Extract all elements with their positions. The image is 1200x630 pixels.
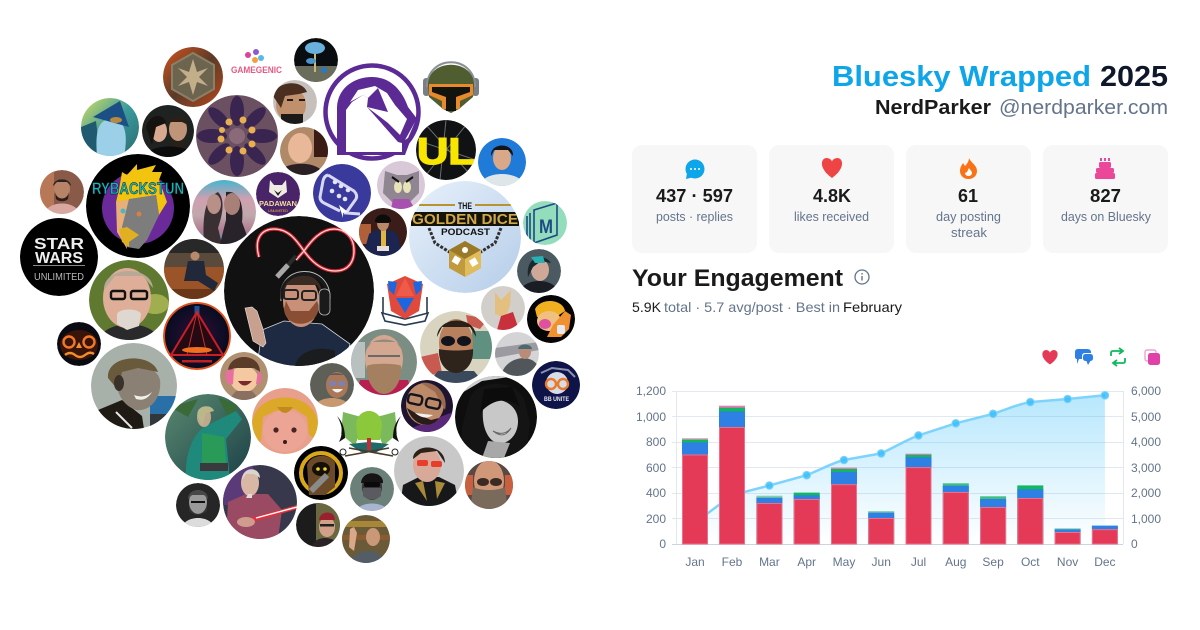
avatar: comic man bbox=[273, 80, 317, 124]
right axis labels: 1,000 bbox=[1131, 512, 1161, 526]
icon: likes bbox=[1042, 350, 1058, 364]
right axis labels: 6,000 bbox=[1131, 384, 1161, 398]
bar: Dec bbox=[1092, 526, 1118, 544]
right axis labels bbox=[1131, 384, 1161, 551]
icon: reposts bbox=[1111, 348, 1125, 366]
avatar: purple flower bbox=[196, 95, 278, 177]
bar: Sep bbox=[980, 496, 1006, 544]
avatar: green Cthulhu crest bbox=[337, 411, 401, 456]
stat card: days on Bluesky: 827 bbox=[1090, 186, 1121, 206]
lightsaber hilt bbox=[277, 256, 296, 277]
left axis labels: 800 bbox=[646, 435, 666, 449]
avatar: bearded man with red shirt bbox=[351, 329, 417, 395]
avatar: M book logo: M bbox=[539, 217, 553, 238]
avatar: Star Wars Unlimited logo: WARS bbox=[35, 250, 83, 267]
bar: Aug bbox=[943, 483, 969, 544]
month labels: Dec bbox=[1094, 555, 1116, 569]
avatar: woman with red glasses bbox=[394, 436, 464, 506]
bar: Jan bbox=[682, 438, 708, 544]
avatar: D20 book logo bbox=[382, 276, 428, 325]
month labels: Aug bbox=[945, 555, 966, 569]
stacked bars bbox=[682, 406, 1118, 544]
left axis labels: 200 bbox=[646, 512, 666, 526]
avatar: pink-haired cartoon girl bbox=[220, 352, 268, 400]
avatar: wizard bird bbox=[81, 98, 139, 156]
cumulative line with points bbox=[695, 392, 1109, 523]
heading: Your Engagement: Your Engagement bbox=[632, 265, 843, 292]
avatar: BB8 badge: BB UNITE bbox=[544, 396, 570, 403]
month labels: Apr bbox=[797, 555, 816, 569]
avatar: BB8 badge bbox=[532, 361, 580, 409]
avatar: Jawa in hood bbox=[294, 446, 348, 500]
user name and handle: NerdParker bbox=[875, 97, 991, 119]
icon: replies bbox=[1075, 349, 1093, 365]
avatar: sketched man smiling bbox=[91, 343, 177, 429]
bar: Mar bbox=[756, 496, 782, 544]
stat card: posts and replies: posts · replies bbox=[656, 210, 733, 224]
avatar: purple arrow house logo bbox=[326, 66, 418, 158]
stat card: days on Bluesky bbox=[1043, 145, 1168, 253]
title: 2025 bbox=[1100, 61, 1168, 93]
stat card: days on Bluesky: days on Bluesky bbox=[1061, 210, 1152, 224]
left axis labels: 400 bbox=[646, 486, 666, 500]
right axis labels: 4,000 bbox=[1131, 435, 1161, 449]
bar: Feb bbox=[719, 406, 745, 544]
avatar: man in aviators bbox=[420, 311, 492, 383]
avatar: hexagon sun emblem bbox=[163, 47, 223, 107]
avatar: bald man bbox=[278, 127, 328, 175]
avatar: Padawan Unlimited logo: UNLIMITED bbox=[268, 208, 288, 213]
stat card: posts and replies: 437 · 597 bbox=[656, 186, 733, 206]
right axis labels: 3,000 bbox=[1131, 461, 1161, 475]
avatar: woman in snow bbox=[495, 332, 539, 376]
avatar: Golden Dice Podcast logo: THE bbox=[458, 201, 472, 211]
avatar: couple portrait bbox=[142, 105, 194, 157]
engagement summary: 5.9K bbox=[632, 299, 662, 315]
month labels: Sep bbox=[982, 555, 1004, 569]
avatar: main profile, NerdParker with neon infinity bbox=[224, 216, 374, 367]
user name and handle: @nerdparker.com bbox=[999, 97, 1168, 119]
month labels bbox=[685, 555, 1116, 569]
avatar: smiling woman with glasses bbox=[310, 363, 354, 407]
stat card: likes received: 4.8K bbox=[813, 186, 851, 206]
avatar: Wario bbox=[527, 295, 575, 343]
month labels: Nov bbox=[1057, 555, 1078, 569]
left axis labels: 1,200 bbox=[636, 384, 666, 398]
icon: quotes bbox=[1145, 350, 1160, 365]
right axis labels: 5,000 bbox=[1131, 410, 1161, 424]
avatar: glowing triangle bbox=[164, 303, 230, 369]
avatar: Gamegenic logo bbox=[231, 49, 282, 75]
avatar: Rybackstun logo bbox=[86, 154, 190, 258]
avatar: UL yellow logo bbox=[416, 120, 476, 180]
avatar: Mandalorian helmet bbox=[423, 62, 479, 113]
engagement summary: total · 5.7 avg/post · Best in bbox=[664, 299, 840, 315]
avatar: masked person bbox=[350, 467, 394, 511]
bar: Apr bbox=[794, 493, 820, 544]
left axis labels: 1,000 bbox=[636, 410, 666, 424]
icon: heart bbox=[822, 158, 842, 178]
avatar: Gamegenic logo: GAMEGENIC bbox=[231, 65, 282, 75]
month labels: Jun bbox=[872, 555, 891, 569]
stat card: day posting streak: day posting bbox=[936, 210, 1001, 224]
avatar: elf sketch bbox=[481, 286, 525, 330]
NerdParker portrait bbox=[245, 271, 350, 367]
avatar: man with glasses on purple bbox=[401, 380, 453, 432]
month labels: Feb bbox=[722, 555, 743, 569]
left axis labels: 0 bbox=[659, 537, 666, 551]
avatar: Golden Dice Podcast logo bbox=[409, 181, 521, 293]
avatar: Count Dooku with red lightsaber bbox=[223, 465, 297, 539]
avatar: Star Wars Unlimited logo: UNLIMITED bbox=[34, 271, 84, 283]
avatar: grey bat creature bbox=[377, 161, 425, 209]
stat card: day posting streak bbox=[906, 145, 1031, 253]
avatar: Rybackstun logo: RYBACKSTUN bbox=[92, 179, 184, 198]
title: Bluesky Wrapped bbox=[832, 61, 1091, 93]
bar: May bbox=[831, 468, 857, 544]
avatar: blue mushrooms bbox=[294, 38, 338, 82]
avatar: man on blue bbox=[478, 138, 526, 186]
stat card: likes received: likes received bbox=[794, 210, 869, 224]
avatar: black and white portrait of a woman bbox=[455, 376, 537, 458]
engagement summary: February bbox=[843, 299, 902, 315]
month labels: Jul bbox=[911, 555, 926, 569]
bar: Jun bbox=[868, 511, 894, 544]
bar: Oct bbox=[1017, 485, 1043, 544]
avatar: Star Wars Unlimited logo bbox=[20, 218, 98, 296]
avatar: Golden Dice Podcast logo: GOLDEN DICE bbox=[412, 212, 518, 228]
left axis labels: 600 bbox=[646, 461, 666, 475]
icon: info bbox=[855, 270, 869, 284]
icon: flame bbox=[960, 158, 977, 179]
avatar: Golden Dice Podcast logo: PODCAST bbox=[441, 227, 491, 237]
avatar: man in red hat bbox=[296, 503, 340, 547]
avatar: Padawan Unlimited logo: PADAWAN bbox=[259, 199, 297, 208]
avatar: Sailor Moon cartoon bbox=[252, 388, 319, 454]
avatar: man waving in game shop bbox=[342, 515, 390, 563]
avatar: bearded man with headset bbox=[40, 170, 84, 214]
user name and handle bbox=[875, 97, 1168, 119]
avatar: bearded man black and white bbox=[176, 483, 220, 527]
month labels: Oct bbox=[1021, 555, 1040, 569]
stat card: posts and replies bbox=[632, 145, 757, 253]
month labels: May bbox=[833, 555, 855, 569]
chart legend icons bbox=[1042, 348, 1160, 366]
avatar: Star Wars Unlimited logo: STAR bbox=[34, 236, 85, 253]
avatar bubble cluster bbox=[20, 38, 580, 563]
avatar: green cloaked elf bbox=[165, 394, 251, 480]
bar: Jul bbox=[906, 454, 932, 544]
right axis labels: 0 bbox=[1131, 537, 1138, 551]
avatar: man with glasses and white beard bbox=[89, 260, 169, 340]
engagement chart bbox=[636, 384, 1161, 569]
avatar: teal hair person bbox=[517, 249, 561, 293]
stat card: likes received bbox=[769, 145, 894, 253]
month labels: Jan bbox=[685, 555, 705, 569]
right axis labels: 2,000 bbox=[1131, 486, 1161, 500]
month labels: Mar bbox=[759, 555, 780, 569]
avatar: man on couch bbox=[164, 239, 224, 301]
cumulative area bbox=[695, 395, 1105, 544]
avatar: Padawan Unlimited logo bbox=[256, 172, 300, 216]
stat card: day posting streak: streak bbox=[951, 226, 988, 240]
avatar: carved pumpkin bbox=[57, 322, 101, 366]
avatar: M book logo bbox=[523, 201, 567, 245]
bar: Nov bbox=[1055, 528, 1081, 544]
grid lines bbox=[672, 391, 1124, 544]
avatar: kiss portrait bbox=[192, 180, 256, 244]
avatar: bald bearded man in shades bbox=[465, 460, 513, 509]
avatar: blue dice chat logo bbox=[313, 164, 371, 222]
left axis labels bbox=[636, 384, 666, 551]
icon: chat bubble bbox=[686, 160, 704, 179]
engagement summary bbox=[632, 299, 902, 315]
icon: birthday cake bbox=[1095, 158, 1115, 179]
stat card: day posting streak: 61 bbox=[958, 186, 978, 206]
avatar: UL yellow logo: UL bbox=[417, 131, 475, 172]
neon infinity sign bbox=[257, 229, 354, 271]
avatar: Michael Jackson portrait bbox=[359, 208, 407, 256]
